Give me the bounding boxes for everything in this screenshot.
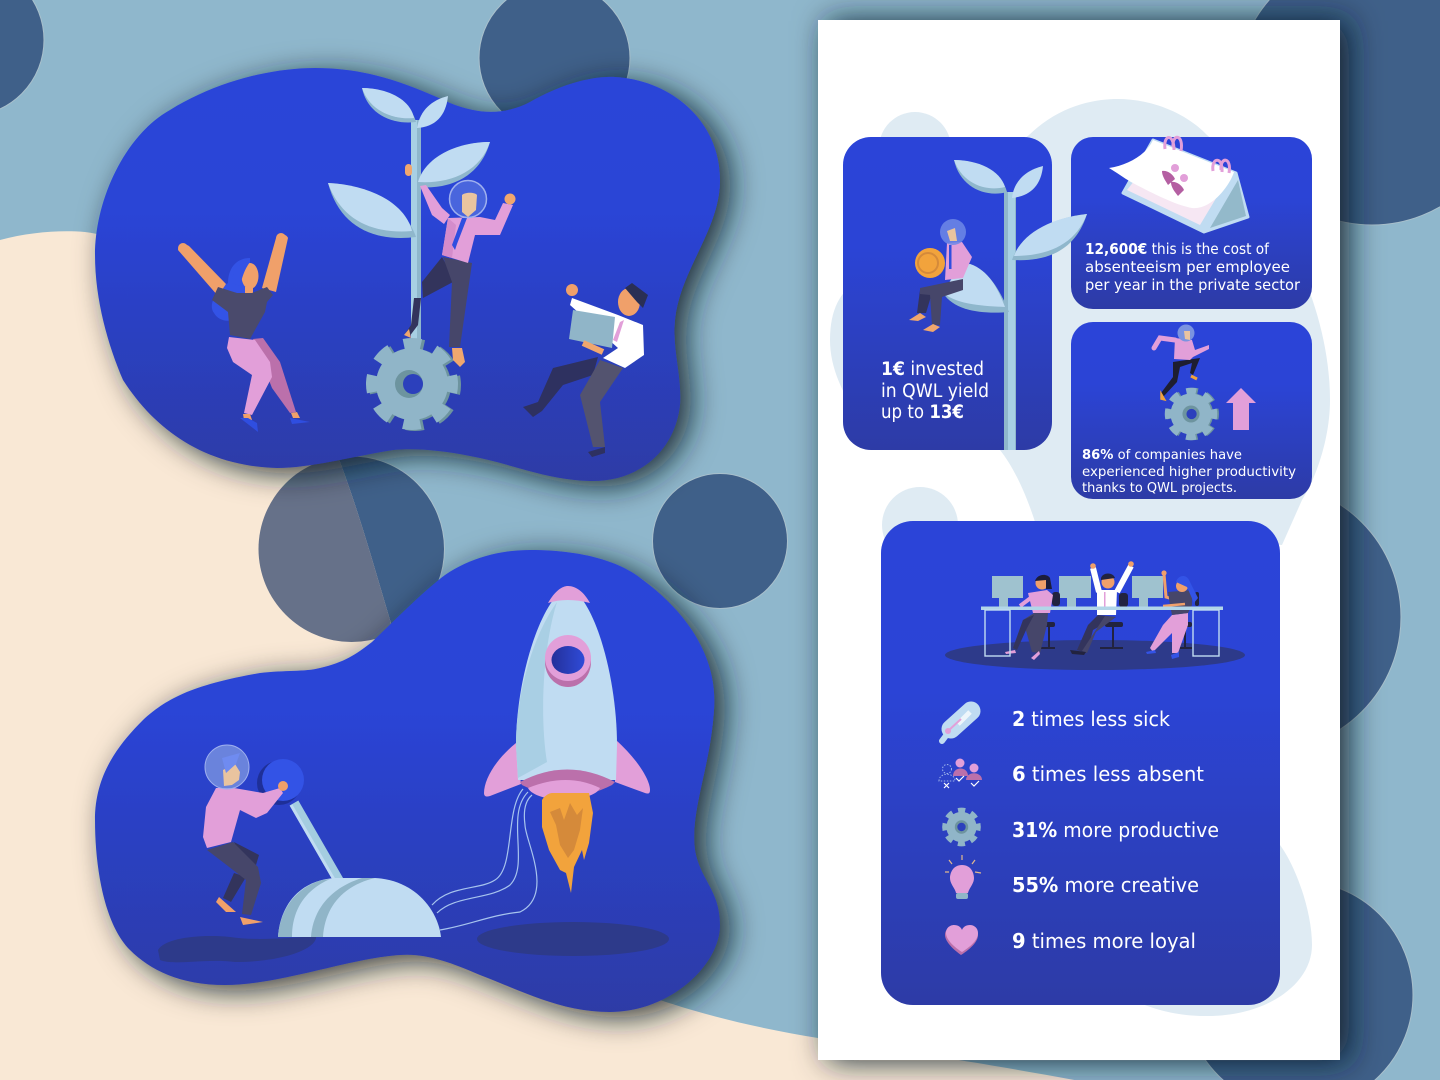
text: absenteeism cost [1085, 240, 1301, 294]
text: productivity: experienced higher productivity [1082, 464, 1296, 480]
person: man carrying box [523, 283, 648, 457]
person: middle worker cheering [1070, 561, 1134, 655]
blob panel: rocket scene [95, 550, 720, 1012]
person: right worker [1146, 570, 1198, 659]
ground shadows [158, 922, 669, 962]
person: astronaut at lever [203, 745, 288, 925]
person: left worker [1005, 575, 1053, 660]
text: less sick: 2 times less sick [1012, 707, 1170, 731]
desk [981, 606, 1223, 656]
text: productivity: thanks to QWL projects. [1082, 480, 1237, 496]
card: productivity [1071, 322, 1312, 499]
icon: light bulb [945, 855, 981, 899]
text: return on investment: 1€ invested [881, 359, 984, 380]
icon: people attendance [939, 758, 982, 788]
text: more productive: 31% more productive [1012, 818, 1219, 842]
text: absenteeism cost: 12,600€ this is the cost of [1085, 240, 1270, 258]
text: more loyal: 9 times more loyal [1012, 929, 1196, 953]
text: return on investment: up to 13€ [881, 402, 964, 423]
pale decorative blobs [830, 99, 1330, 1016]
icon: heart [945, 925, 978, 955]
cream wave [0, 231, 1085, 1080]
monitors [992, 576, 1163, 608]
person: sitting with coin [909, 219, 972, 332]
text: return on investment [881, 359, 989, 423]
arrow: up [1226, 388, 1256, 430]
text: less absent: 6 times less absent [1012, 762, 1204, 786]
control lever and dome [257, 759, 441, 937]
person: woman cheering [178, 233, 310, 432]
panel: white infographic sheet [818, 20, 1340, 1060]
plant with gear [328, 88, 490, 432]
office desk scene [945, 561, 1245, 670]
plant [943, 160, 1087, 450]
text: productivity [1082, 447, 1296, 496]
card: absenteeism cost [1071, 137, 1312, 309]
person: runner [1154, 324, 1209, 400]
text: absenteeism cost: per year in the private sector [1085, 276, 1301, 294]
icon: calendar [1109, 137, 1248, 232]
text: absenteeism cost: absenteeism per employee [1085, 258, 1290, 276]
icon: gear [942, 807, 981, 847]
icon: thermometer [942, 711, 971, 741]
circle overlap on cream [258, 460, 391, 642]
wires [432, 789, 537, 930]
card: benefits list [881, 521, 1280, 1005]
person: climbing man with helmet [404, 164, 516, 367]
gear [1164, 387, 1220, 441]
chairs [1041, 592, 1199, 649]
text: more creative: 55% more creative [1012, 873, 1199, 897]
card: return on investment [843, 137, 1087, 450]
rocket [484, 586, 650, 893]
text: return on investment: in QWL yield [881, 381, 989, 402]
gear [365, 337, 462, 432]
blob panel: growth scene [95, 68, 720, 481]
text: productivity: 86% of companies have [1082, 447, 1242, 463]
